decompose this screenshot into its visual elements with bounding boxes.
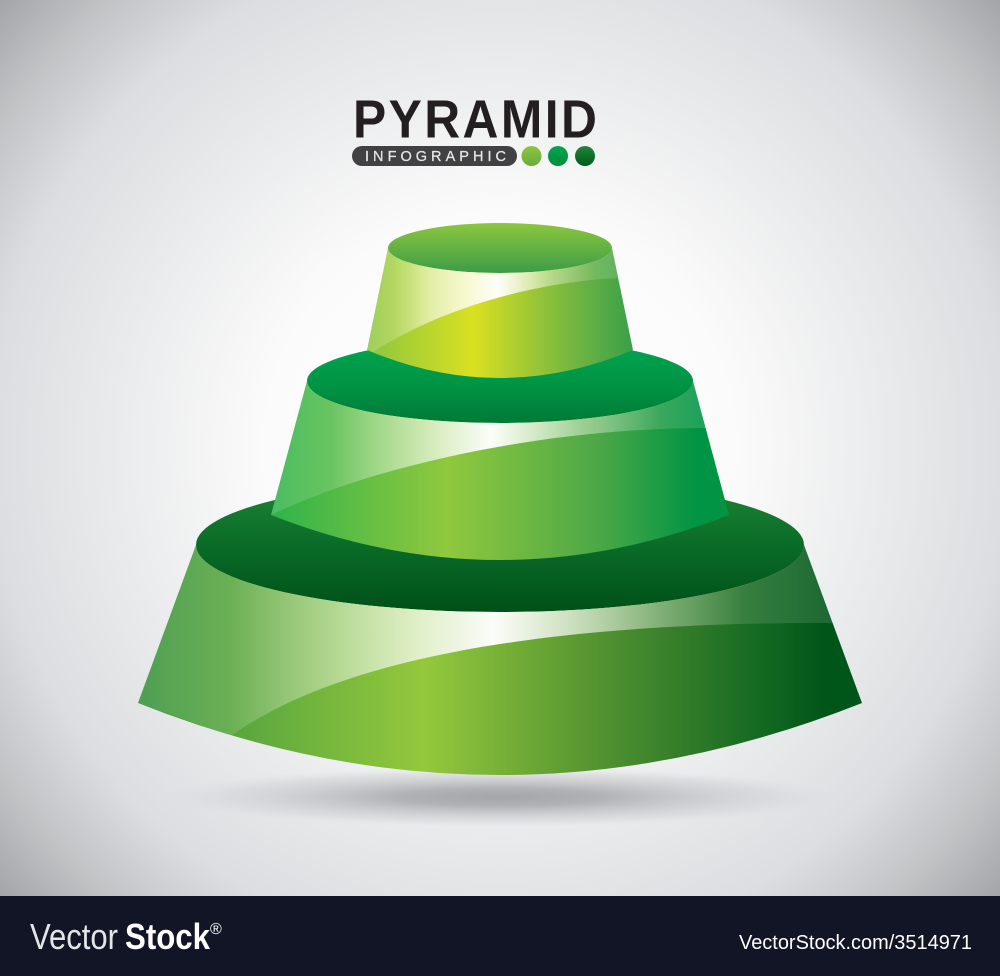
footer logo: VectorStock: Vector — [30, 916, 118, 957]
tier 3 glossy highlight — [138, 545, 833, 736]
tier 1 top ellipse — [388, 223, 612, 273]
tier 3: bottom level — [138, 478, 862, 775]
footer logo: VectorStock: ® — [210, 921, 222, 938]
footer image id: VectorStock.com/3514971 — [739, 932, 972, 954]
tier 1: top level — [367, 223, 633, 378]
footer bar — [0, 896, 1000, 976]
tier 1 body — [367, 248, 633, 378]
footer logo: VectorStock: Stock — [125, 916, 211, 957]
tier 2 body — [271, 381, 729, 560]
tier 1 glossy highlight — [367, 248, 618, 352]
subtitle: INFOGRAPHIC: INFOGRAPHIC — [365, 149, 506, 165]
subtitle pill — [352, 146, 517, 166]
tier 2 glossy highlight — [271, 381, 707, 515]
title: PYRAMID: PYRAMID — [353, 89, 599, 149]
tier 2: middle level — [271, 339, 729, 560]
ground shadow — [160, 767, 840, 827]
tier 3 top ellipse — [196, 478, 804, 612]
dot: light green — [522, 146, 542, 166]
tier 3 body — [138, 545, 862, 775]
tier 2 top ellipse — [307, 339, 693, 423]
title block — [352, 89, 599, 166]
dot: medium green — [548, 146, 568, 166]
pyramid — [138, 223, 862, 775]
dot: dark green — [575, 146, 595, 166]
